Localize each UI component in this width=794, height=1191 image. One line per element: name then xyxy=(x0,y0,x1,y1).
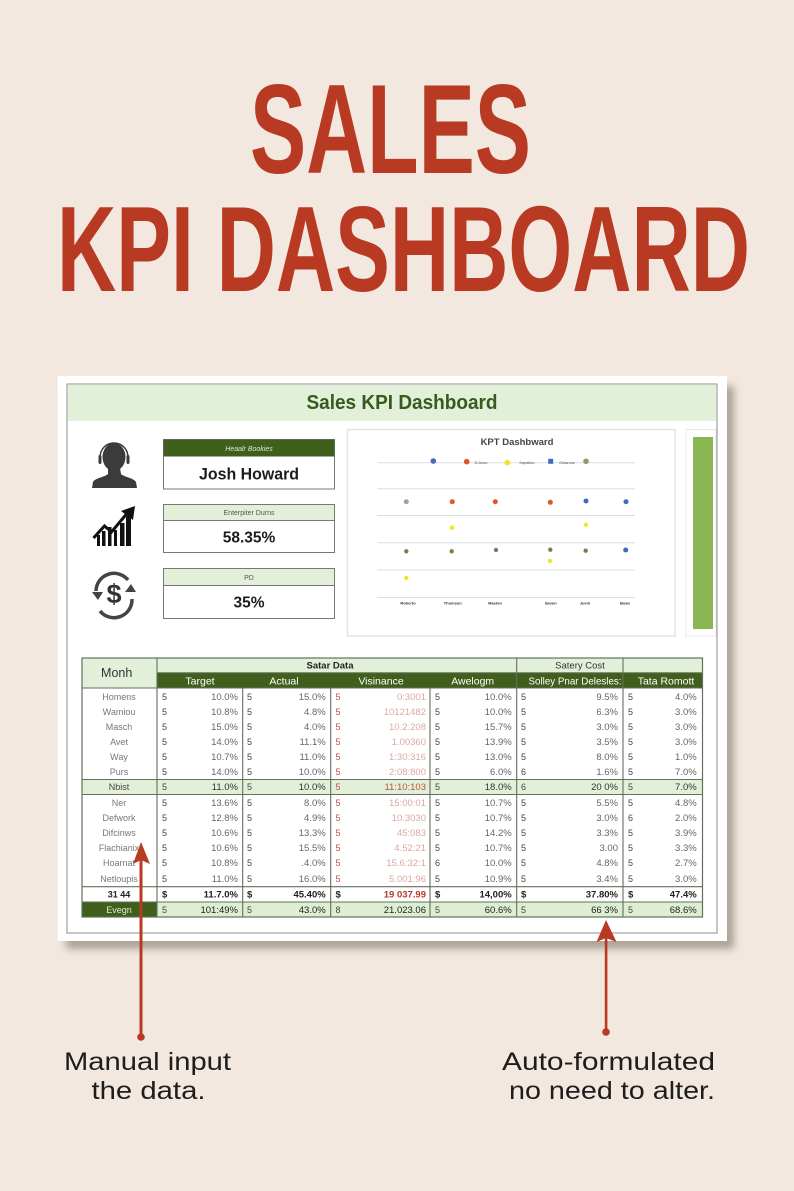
dollar signs: 5 xyxy=(162,828,167,838)
chart: KPT Dashbward dot plot: Roberto xyxy=(400,600,416,606)
column: target values: 101:49% xyxy=(200,905,239,916)
box: percentage one: Enterpiter Durns xyxy=(224,510,275,517)
column: actual values: 11.1% xyxy=(299,737,326,748)
column: total values: 4.0% xyxy=(675,692,697,703)
dollar signs: 5 xyxy=(521,858,526,868)
column: target values: 13.6% xyxy=(211,798,239,809)
column: variance values: 15.6:32:1 xyxy=(386,858,426,869)
dollar signs: 5 xyxy=(336,692,341,702)
column: prior values: 8.0% xyxy=(596,752,619,763)
column: total values xyxy=(670,692,697,916)
dollar signs: 5 xyxy=(247,905,252,915)
sheet heading: Sales KPI Dashboard xyxy=(306,392,498,414)
dollar signs: 5 xyxy=(521,874,526,884)
month labels: Flachianix xyxy=(99,843,140,853)
column: variance values: 10.3030 xyxy=(392,813,426,824)
column: average values: 15.7% xyxy=(485,722,512,733)
column: average values: 60.6% xyxy=(485,905,512,916)
chart: KPT Dashbward dot plot: Kapaitou xyxy=(520,461,534,465)
dollar signs: 6 xyxy=(435,858,440,868)
column: prior values: 66 3% xyxy=(591,905,619,916)
dollar signs xyxy=(162,692,634,915)
column: average values: 10.7% xyxy=(485,798,512,809)
dollar signs: 5 xyxy=(162,767,167,777)
dollar signs: 5 xyxy=(628,737,633,747)
column: actual values: 15.0% xyxy=(299,692,326,703)
dollar signs: 5 xyxy=(162,874,167,884)
column: actual values: 15.5% xyxy=(299,843,326,854)
dollar signs: 5 xyxy=(435,782,440,792)
column: target values: 11.0% xyxy=(212,874,239,885)
column: prior values: 3.5% xyxy=(596,737,619,748)
column: prior values: 5.5% xyxy=(596,798,619,809)
table grid xyxy=(82,658,702,917)
dollar signs: 5 xyxy=(628,707,633,717)
chart: KPT Dashbward dot plot: Juvin xyxy=(580,600,591,606)
column: variance values xyxy=(384,692,426,916)
sheet heading xyxy=(68,385,716,421)
table header: Visinance xyxy=(358,676,404,688)
chart: KPT Dashbward dot plot: D.Anou xyxy=(475,461,487,465)
dollar signs: 5 xyxy=(521,722,526,732)
column: average values: 10.0% xyxy=(485,858,512,869)
dollar signs: 5 xyxy=(336,752,341,762)
dollar signs: $ xyxy=(435,890,441,900)
dollar signs: 5 xyxy=(435,752,440,762)
dollar signs: 5 xyxy=(247,752,252,762)
chart: KPT Dashbward dot plot: Ontarous xyxy=(559,461,575,465)
dollar signs: 5 xyxy=(162,737,167,747)
column: total values: 3.0% xyxy=(675,722,697,733)
dollar signs: 5 xyxy=(628,782,633,792)
column: actual values: 43.0% xyxy=(299,905,326,916)
column: actual values: 10.0% xyxy=(299,767,326,778)
column: total values: 3.0% xyxy=(675,737,697,748)
dollar signs: 5 xyxy=(162,722,167,732)
month labels: Purs xyxy=(110,767,129,777)
column: target values: 10.0% xyxy=(211,692,239,703)
column: prior values: 6.3% xyxy=(596,707,619,718)
column: target values: 11.0% xyxy=(212,782,239,793)
month labels: Difcinws xyxy=(102,828,136,838)
dollar signs: 5 xyxy=(435,767,440,777)
callout: auto-formulated: Auto-formulated xyxy=(502,1048,715,1076)
column: actual values: 16.0% xyxy=(299,874,326,885)
dollar signs: 5 xyxy=(521,798,526,808)
month labels: Defwork xyxy=(102,813,136,823)
box: head name: Heaalr Bookies xyxy=(225,446,273,453)
dollar signs: 5 xyxy=(628,752,633,762)
dollar signs: 5 xyxy=(435,737,440,747)
dollar signs: $ xyxy=(521,890,527,900)
dollar signs: $ xyxy=(247,890,253,900)
dollar signs: 5 xyxy=(521,737,526,747)
dollar signs: 5 xyxy=(247,737,252,747)
column: target values: 11.7.0% xyxy=(204,890,239,900)
dollar signs: 5 xyxy=(521,828,526,838)
box: percentage one: 58.35% xyxy=(223,530,275,546)
dollar signs: 8 xyxy=(336,905,341,915)
dollar signs: 5 xyxy=(336,858,341,868)
dollar signs: 5 xyxy=(628,692,633,702)
dollar signs: 5 xyxy=(435,722,440,732)
callout: manual input: Manual input xyxy=(64,1048,231,1076)
dollar signs: 5 xyxy=(521,692,526,702)
table header: Actual xyxy=(269,676,299,688)
chart: KPT Dashbward dot plot: Thomson xyxy=(444,600,462,606)
column: prior values: 3.0% xyxy=(596,722,619,733)
dollar signs: 5 xyxy=(247,828,252,838)
callout: auto-formulated: no need to alter. xyxy=(509,1077,715,1105)
dollar signs: 6 xyxy=(521,782,526,792)
dollar signs: 5 xyxy=(435,813,440,823)
dollar signs: 5 xyxy=(521,707,526,717)
column: variance values: 0:3001 xyxy=(397,692,426,703)
card shadow xyxy=(66,386,734,949)
column: actual values: 45.40% xyxy=(293,890,326,900)
column: actual values: 4.0% xyxy=(304,722,326,733)
dollar signs: 5 xyxy=(162,752,167,762)
month labels: Wamiou xyxy=(103,707,135,717)
dollar signs: 5 xyxy=(628,843,633,853)
dollar signs: 5 xyxy=(336,722,341,732)
column: total values: 68.6% xyxy=(670,905,697,916)
column: actual values: .4.0% xyxy=(301,858,326,869)
column: average values: 10.0% xyxy=(485,707,512,718)
dollar signs: $ xyxy=(162,890,168,900)
column: average values: 13.9% xyxy=(485,737,512,748)
column: actual values: 8.0% xyxy=(304,798,326,809)
column: target values: 10.7% xyxy=(211,752,239,763)
month labels: Homens xyxy=(102,692,136,702)
icon: dollar cycle: $ xyxy=(106,579,122,609)
dollar signs: 5 xyxy=(435,692,440,702)
dollar signs: 5 xyxy=(162,858,167,868)
dollar signs: 5 xyxy=(162,905,167,915)
dollar signs: 5 xyxy=(521,813,526,823)
month labels: Way xyxy=(110,752,128,762)
column: total values: 7.0% xyxy=(675,782,697,793)
column: total values: 47.4% xyxy=(670,890,697,900)
column: target values: 14.0% xyxy=(211,737,239,748)
dollar signs: 5 xyxy=(247,767,252,777)
title: SALES xyxy=(250,58,531,200)
month labels: Hoarnat xyxy=(103,858,136,868)
panel: dashboard sheet xyxy=(58,376,727,941)
dollar signs: 5 xyxy=(435,905,440,915)
dollar signs: 6 xyxy=(628,813,633,823)
dollar signs: 5 xyxy=(628,722,633,732)
dollar signs: 5 xyxy=(247,692,252,702)
month labels: Avet xyxy=(110,737,128,747)
month labels: 31 44 xyxy=(108,890,130,900)
dollar signs: 5 xyxy=(162,843,167,853)
column: prior values: 3.00 xyxy=(600,843,618,854)
dollar signs: 5 xyxy=(247,813,252,823)
title xyxy=(57,58,750,317)
column: prior values xyxy=(586,692,619,916)
dollar signs: 5 xyxy=(247,722,252,732)
table header: Solley Pnar Delesles: xyxy=(528,676,622,688)
column: average values: 14.2% xyxy=(485,828,512,839)
column: target values: 12.8% xyxy=(211,813,239,824)
dollar signs: 5 xyxy=(336,843,341,853)
column: total values: 3.0% xyxy=(675,874,697,885)
dollar signs: 5 xyxy=(435,798,440,808)
dollar signs: 5 xyxy=(628,828,633,838)
dollar signs: 5 xyxy=(247,798,252,808)
column: actual values: 4.8% xyxy=(304,707,326,718)
callout: auto-formulated xyxy=(502,1048,715,1105)
dollar signs: 5 xyxy=(162,707,167,717)
box: percentage one xyxy=(164,504,334,552)
callout: manual input: the data. xyxy=(92,1077,206,1105)
box: percentage two xyxy=(164,568,334,618)
column: target values: 15.0% xyxy=(211,722,239,733)
icon: dollar cycle xyxy=(92,573,136,618)
column: variance values: 1.00360 xyxy=(392,737,426,748)
table: sales data xyxy=(82,658,702,917)
dollar signs: 5 xyxy=(162,692,167,702)
column: prior values: 1.6% xyxy=(596,767,619,778)
dollar signs: 5 xyxy=(336,737,341,747)
panel: green side bar xyxy=(686,430,716,636)
column: total values: 1.0% xyxy=(675,752,697,763)
column: average values: 18.0% xyxy=(485,782,512,793)
column: total values: 3.3% xyxy=(675,843,697,854)
table header: Monh xyxy=(101,666,132,680)
dollar signs: 5 xyxy=(336,828,341,838)
dollar signs: 5 xyxy=(628,767,633,777)
column: average values: 10.7% xyxy=(485,813,512,824)
column: target values: 10.8% xyxy=(211,858,239,869)
dollar signs: 5 xyxy=(435,843,440,853)
column: total values: 3.9% xyxy=(675,828,697,839)
column: average values: 10.9% xyxy=(485,874,512,885)
column: total values: 4.8% xyxy=(675,798,697,809)
column: average values: 14,00% xyxy=(479,890,512,900)
box: head name xyxy=(164,440,334,489)
month labels: Ner xyxy=(112,798,126,808)
chart: KPT Dashbward dot plot: Savon xyxy=(545,600,557,606)
column: variance values: 5.001:96 xyxy=(389,874,426,885)
column: variance values: 10121482 xyxy=(384,707,426,718)
column: prior values: 20 0% xyxy=(591,782,619,793)
column: variance values: 19 037.99 xyxy=(384,890,426,900)
chart: KPT Dashbward dot plot: Boan xyxy=(620,600,631,606)
month labels: Nbist xyxy=(109,782,130,792)
month labels xyxy=(99,692,140,915)
dollar signs: 5 xyxy=(336,767,341,777)
dollar signs: 5 xyxy=(247,858,252,868)
icon: person with headset xyxy=(92,443,137,488)
dollar signs: 5 xyxy=(521,843,526,853)
arrow: manual input xyxy=(133,842,150,1041)
highlight rows xyxy=(82,780,702,917)
box: percentage two: 35% xyxy=(233,594,265,612)
dollar signs: 5 xyxy=(628,858,633,868)
dollar signs: 5 xyxy=(162,782,167,792)
table header: Target xyxy=(185,676,215,688)
dollar signs: 5 xyxy=(435,874,440,884)
month labels: Netloupis xyxy=(100,874,138,884)
column: total values: 2.0% xyxy=(675,813,697,824)
dollar signs: 5 xyxy=(162,813,167,823)
column: variance values: 45:083 xyxy=(397,828,426,839)
dollar signs: 5 xyxy=(521,752,526,762)
dollar signs: 5 xyxy=(247,782,252,792)
dollar signs: 5 xyxy=(336,874,341,884)
column: variance values: 1:30:316 xyxy=(389,752,426,763)
column: prior values: 9.5% xyxy=(596,692,619,703)
column: target values: 10.8% xyxy=(211,707,239,718)
table header: Satery Cost xyxy=(555,660,605,672)
chart: KPT Dashbward dot plot xyxy=(348,430,675,636)
dollar signs: 5 xyxy=(336,707,341,717)
dollar signs: 5 xyxy=(247,707,252,717)
dollar signs: 5 xyxy=(336,782,341,792)
table header: Awelogm xyxy=(451,676,494,688)
dollar signs: 5 xyxy=(435,707,440,717)
callout: manual input xyxy=(64,1048,231,1105)
column: variance values: 10.2.208 xyxy=(389,722,426,733)
column: variance values: 21.023.06 xyxy=(384,905,426,916)
column: actual values xyxy=(293,692,326,916)
dollar signs: 5 xyxy=(247,843,252,853)
column: average values xyxy=(479,692,512,916)
dollar signs: 5 xyxy=(628,905,633,915)
column: average values: 10.0% xyxy=(485,692,512,703)
icon: growth chart xyxy=(94,506,135,546)
column: prior values: 3.3% xyxy=(596,828,619,839)
table header: Satar Data xyxy=(306,660,354,672)
column: target values: 10.6% xyxy=(211,828,239,839)
box: head name: Josh Howard xyxy=(199,464,299,484)
column: total values: 3.0% xyxy=(675,707,697,718)
column: target values: 10.6% xyxy=(211,843,239,854)
column: target values xyxy=(200,692,239,916)
column: prior values: 3.0% xyxy=(596,813,619,824)
dollar signs: $ xyxy=(628,890,634,900)
column: target values: 14.0% xyxy=(211,767,239,778)
month labels: Masch xyxy=(106,722,132,732)
dollar signs: 5 xyxy=(336,813,341,823)
column: actual values: 11.0% xyxy=(299,752,326,763)
dollar signs: 5 xyxy=(628,798,633,808)
column: prior values: 3.4% xyxy=(596,874,619,885)
column: total values: 7.0% xyxy=(675,767,697,778)
column: average values: 13.0% xyxy=(485,752,512,763)
dollar signs: 5 xyxy=(628,874,633,884)
arrow: auto-formulated xyxy=(596,920,616,1036)
chart: KPT Dashbward dot plot: Maslon xyxy=(488,600,502,606)
column: variance values: 4.52:21 xyxy=(394,843,426,854)
table header: Tata Romott xyxy=(638,676,694,688)
column: total values: 2.7% xyxy=(675,858,697,869)
column: actual values: 4.9% xyxy=(304,813,326,824)
box: percentage two: PD xyxy=(244,575,254,582)
column: variance values: 15:00:01 xyxy=(389,798,426,809)
dollar signs: 5 xyxy=(521,905,526,915)
month labels: Evegn xyxy=(106,905,132,915)
table header xyxy=(82,658,702,688)
column: actual values: 13.3% xyxy=(299,828,326,839)
column: prior values: 37.80% xyxy=(586,890,619,900)
column: actual values: 10.0% xyxy=(299,782,326,793)
dollar signs: 5 xyxy=(435,828,440,838)
dollar signs: 5 xyxy=(247,874,252,884)
dollar signs: $ xyxy=(336,890,342,900)
chart: KPT Dashbward dot plot: KPT Dashbward xyxy=(481,437,554,448)
column: average values: 10.7% xyxy=(485,843,512,854)
dollar signs: 5 xyxy=(336,798,341,808)
column: prior values: 4.8% xyxy=(596,858,619,869)
column: average values: 6.0% xyxy=(490,767,512,778)
column: variance values: 2:08:800 xyxy=(389,767,426,778)
dollar signs: 6 xyxy=(521,767,526,777)
dollar signs: 5 xyxy=(162,798,167,808)
column: variance values: 11:10:103 xyxy=(384,782,426,793)
